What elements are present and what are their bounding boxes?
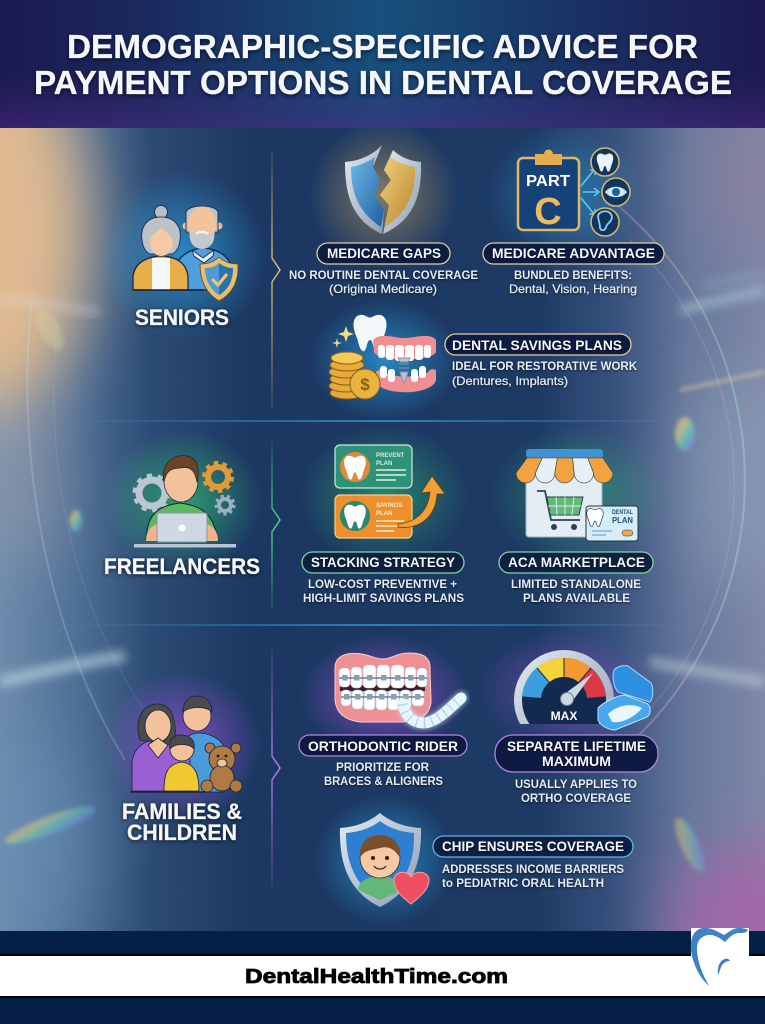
- text: chip note: [442, 862, 624, 890]
- logo: blue tooth outline: [691, 928, 749, 986]
- text: lifetime maximum note: USUALLY APPLIES TO: [515, 777, 637, 791]
- header band: [0, 0, 765, 128]
- text: stacking note: HIGH-LIMIT SAVINGS PLANS: [303, 591, 464, 605]
- label: separate lifetime maximum: SEPARATE LIFETIME: [507, 738, 646, 754]
- text: medicare gaps note: (Original Medicare): [329, 282, 437, 296]
- footer band: [0, 928, 765, 1024]
- website url: DentalHealthTime.com: [245, 966, 508, 988]
- icon: stacked plan cards with arrow: SAVINGS: [376, 503, 403, 509]
- heading: families and children: [122, 799, 242, 845]
- text: orthodontic note: PRIORITIZE FOR: [336, 760, 429, 774]
- icon: marketplace storefront with plan card: DENTAL: [612, 510, 633, 516]
- label: chip ensures coverage: CHIP ENSURES COVERAGE: [442, 838, 624, 854]
- label: stacking strategy: STACKING STRATEGY: [311, 554, 456, 570]
- text: aca note: LIMITED STANDALONE: [511, 577, 641, 591]
- section divider 2: [60, 624, 700, 626]
- label: orthodontic rider: ORTHODONTIC RIDER: [308, 738, 458, 754]
- icon: freelancer at laptop with gears: [134, 456, 236, 548]
- icon: stacked plan cards with arrow: PLAN: [376, 461, 392, 467]
- connector: purple divider with chevron: [272, 648, 280, 888]
- icon: stacked plan cards with arrow: PLAN: [376, 511, 392, 517]
- text: chip note: to PEDIATRIC ORAL HEALTH: [442, 876, 604, 890]
- text: medicare gaps note: [289, 268, 478, 296]
- label: dental savings plans: DENTAL SAVINGS PLANS: [452, 337, 622, 353]
- text: lifetime maximum note: ORTHO COVERAGE: [521, 791, 631, 805]
- text: dental savings note: [452, 359, 637, 388]
- label: aca marketplace: [499, 552, 653, 573]
- label: medicare gaps: MEDICARE GAPS: [327, 245, 441, 261]
- text: orthodontic note: BRACES & ALIGNERS: [324, 774, 443, 788]
- icon: part c clipboard: C: [534, 191, 562, 233]
- text: medicare advantage note: [509, 268, 637, 296]
- label: medicare gaps: [317, 243, 450, 264]
- text: aca note: PLANS AVAILABLE: [523, 591, 630, 605]
- text: dental savings note: IDEAL FOR RESTORATIVE WORK: [452, 359, 637, 373]
- text: medicare advantage note: Dental, Vision, Hearing: [509, 282, 637, 296]
- title: [34, 28, 732, 101]
- label: separate lifetime maximum: MAXIMUM: [542, 753, 611, 769]
- text: stacking note: LOW-COST PREVENTIVE +: [308, 577, 457, 591]
- text: dental savings note: (Dentures, Implants): [452, 374, 568, 388]
- icon: part c clipboard: [518, 148, 630, 236]
- icon: coins, tooth and dentures: [329, 315, 436, 399]
- heading: seniors: SENIORS: [135, 305, 229, 330]
- label: medicare advantage: MEDICARE ADVANTAGE: [492, 245, 655, 261]
- text: medicare gaps note: NO ROUTINE DENTAL COVERAGE: [289, 268, 478, 282]
- icon: child on shield with heart: [340, 813, 429, 907]
- icon: braces and clear aligner: [335, 653, 461, 723]
- section divider 1: [60, 420, 700, 422]
- panel: freelancers: [104, 441, 653, 610]
- icon: marketplace storefront with plan card: [516, 449, 638, 541]
- icon: lifetime maximum gauge and retainer case: MAX: [551, 709, 577, 723]
- icon: stacked plan cards with arrow: [335, 445, 445, 538]
- connector: green divider with chevron: [272, 441, 280, 610]
- text: orthodontic note: [324, 760, 443, 788]
- connector: gold divider with chevron: [272, 152, 280, 410]
- text: stacking note: [303, 577, 464, 605]
- text: medicare advantage note: BUNDLED BENEFITS:: [514, 268, 632, 282]
- icon: lifetime maximum gauge and retainer case: [514, 650, 654, 730]
- label: orthodontic rider: [299, 735, 467, 756]
- icon: cracked shield: [345, 145, 421, 234]
- title: DEMOGRAPHIC-SPECIFIC ADVICE FOR: [67, 28, 698, 65]
- text: aca note: [511, 577, 641, 605]
- panel: seniors: [133, 145, 664, 410]
- icon: stacked plan cards with arrow: PREVENT: [376, 453, 405, 459]
- text: lifetime maximum note: [515, 777, 637, 805]
- label: medicare advantage: [483, 243, 664, 264]
- heading: families and children: FAMILIES &: [122, 799, 242, 824]
- heading: freelancers: FREELANCERS: [104, 554, 260, 579]
- label: aca marketplace: ACA MARKETPLACE: [508, 554, 645, 570]
- icon: senior couple with shield: [133, 206, 238, 301]
- icon: coins, tooth and dentures: $: [360, 375, 370, 394]
- icon: family with teddy bear: [130, 696, 242, 792]
- title: PAYMENT OPTIONS IN DENTAL COVERAGE: [34, 64, 732, 101]
- label: separate lifetime maximum: [495, 735, 658, 772]
- text: chip note: ADDRESSES INCOME BARRIERS: [442, 862, 624, 876]
- heading: families and children: CHILDREN: [127, 820, 237, 845]
- panel: families and children: [122, 648, 658, 907]
- icon: marketplace storefront with plan card: PLAN: [612, 516, 633, 525]
- icon: part c clipboard: PART: [526, 173, 571, 190]
